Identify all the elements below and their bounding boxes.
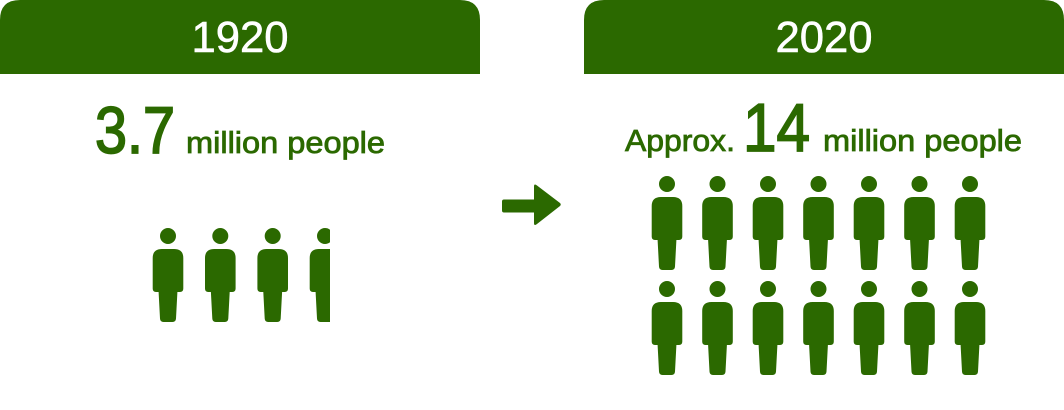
text block: 3.7 million people [95, 93, 385, 167]
text block: 3.7 million people: million people [186, 126, 385, 160]
panel: 1920 header [0, 0, 480, 74]
arrow [502, 184, 561, 225]
pictogram: 2020 population, 14 figures [652, 176, 985, 375]
text block: Approx. 14 million people: million people [823, 124, 1022, 158]
text block: Approx. 14 million people: Approx. [625, 124, 735, 158]
pictogram: 1920 population, 3.7 figures [153, 228, 340, 322]
panel: 2020 header [584, 0, 1064, 74]
text block: 3.7 million people: 3.7 [95, 93, 175, 167]
heading: 2020: 2020 [776, 13, 872, 62]
text block: Approx. 14 million people [625, 90, 1022, 166]
heading: 1920: 1920 [192, 13, 288, 62]
text block: Approx. 14 million people: 14 [743, 90, 810, 166]
